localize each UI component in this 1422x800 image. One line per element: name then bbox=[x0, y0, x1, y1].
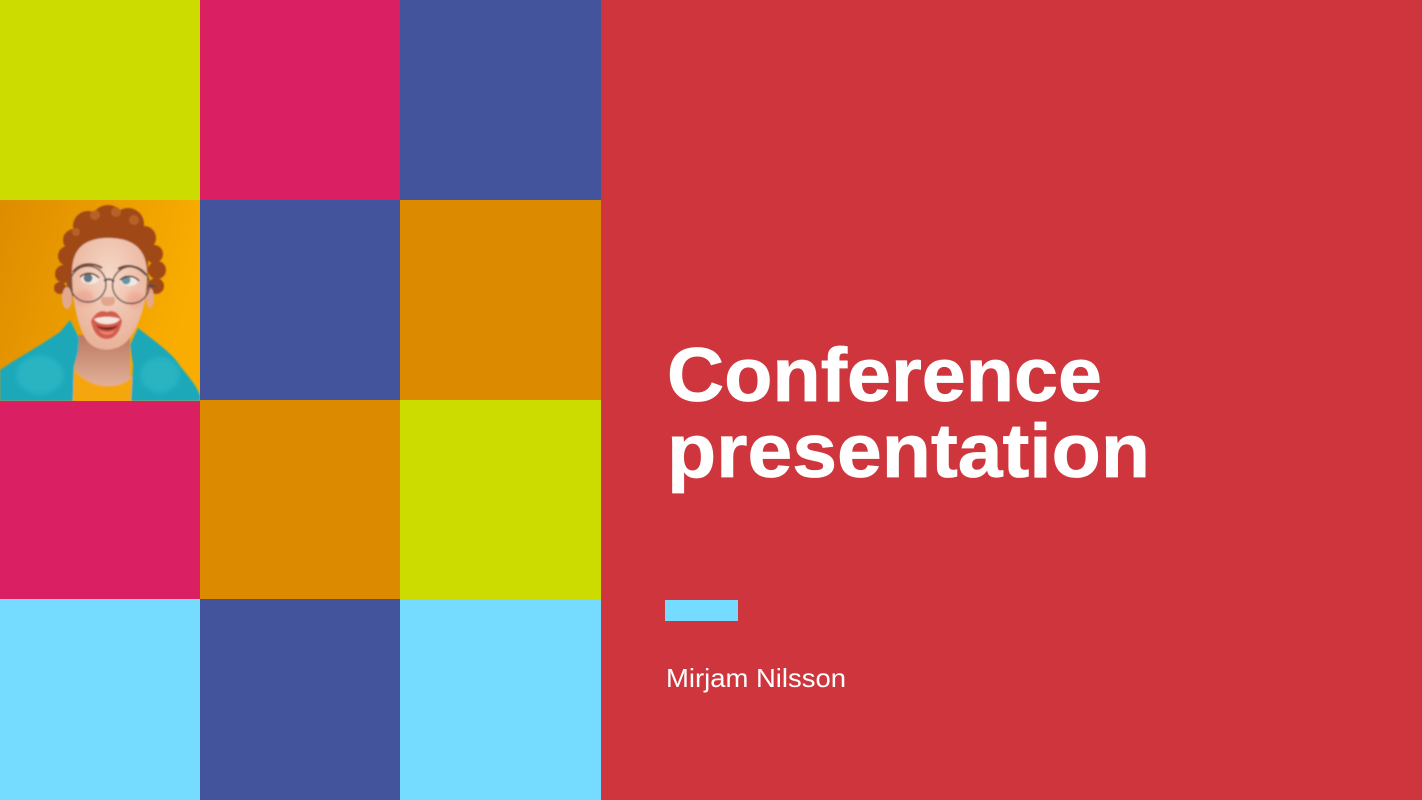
tile: portrait photo of woman in glasses bbox=[0, 200, 200, 401]
ears bbox=[62, 287, 72, 309]
panel: red title background bbox=[601, 0, 1422, 800]
presenter name: Mirjam Nilsson bbox=[666, 663, 846, 693]
accent bar bbox=[665, 600, 738, 621]
mouth bbox=[91, 311, 122, 339]
glasses bbox=[70, 266, 106, 302]
face bbox=[72, 238, 147, 350]
tile: blue row 2 bbox=[200, 200, 400, 400]
tile: lime row 3 bbox=[400, 400, 601, 600]
tile: light blue row 4 right bbox=[400, 600, 601, 800]
title bbox=[667, 333, 1150, 494]
tile: orange row 3 bbox=[200, 400, 400, 599]
nose bbox=[101, 297, 115, 306]
tile: blue row 1 bbox=[400, 0, 601, 200]
neck bbox=[74, 335, 132, 389]
shirt bbox=[73, 366, 133, 401]
coat right bbox=[130, 328, 200, 401]
tile: light blue row 4 bbox=[0, 599, 200, 800]
tile: orange row 2 bbox=[400, 200, 601, 400]
cheek blush bbox=[74, 290, 94, 306]
tile: pink row 1 bbox=[200, 0, 400, 200]
eyebrows bbox=[73, 264, 102, 272]
tile: lime row 1 bbox=[0, 0, 200, 200]
title: presentation bbox=[667, 409, 1150, 494]
tile: pink row 3 bbox=[0, 401, 200, 599]
eyes bbox=[81, 274, 99, 284]
coat left bbox=[0, 320, 79, 401]
tile: blue row 4 bbox=[200, 599, 400, 800]
curly hair bbox=[54, 205, 166, 296]
title: Conference bbox=[667, 333, 1102, 418]
